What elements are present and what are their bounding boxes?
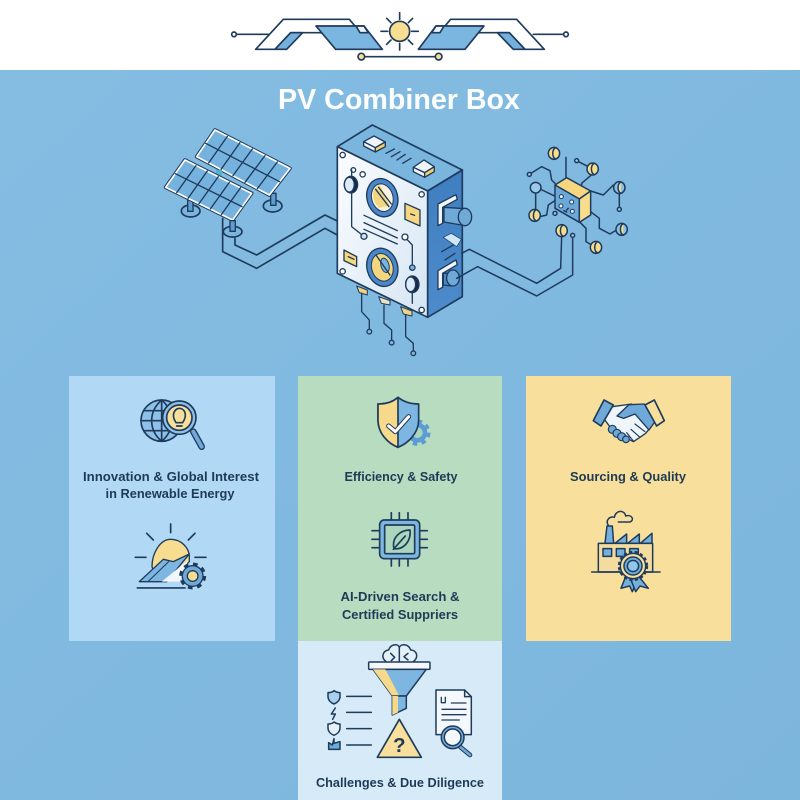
label: AI-Driven Search & bbox=[340, 590, 460, 604]
yellow coin nodes bbox=[529, 147, 627, 253]
front face screws bbox=[340, 152, 424, 313]
label text lines bbox=[364, 215, 397, 244]
central cube bbox=[555, 178, 591, 222]
icon: factory with rosette bbox=[592, 511, 660, 592]
header emblem: circuit panels and sun bbox=[232, 13, 568, 60]
label line 2: Certified Suppriers bbox=[342, 608, 458, 622]
icon: brain funnel bbox=[369, 645, 430, 715]
title: PV Combiner Box bbox=[278, 84, 520, 116]
rotary dials bbox=[362, 175, 402, 290]
icon: shield with gear bbox=[378, 397, 428, 447]
icon: handshake bbox=[593, 400, 664, 443]
panel: efficiency and AI search bbox=[298, 376, 502, 641]
small terminal dots bbox=[527, 159, 621, 237]
label: Sourcing & Quality bbox=[570, 470, 686, 484]
icon: document with magnifier bbox=[436, 690, 471, 755]
icon: chip with leaf bbox=[372, 513, 427, 566]
solar array bbox=[166, 130, 290, 237]
illustration: solar panels and combiner box bbox=[166, 125, 472, 356]
panel: sourcing and quality bbox=[526, 376, 731, 641]
knobs and traces bbox=[344, 170, 419, 303]
label line 2: in Renewable Energy bbox=[106, 487, 234, 501]
bottom terminals and leads bbox=[357, 286, 416, 356]
label: Challenges & Due Diligence bbox=[316, 775, 484, 790]
icon: globe with lightbulb magnifier bbox=[141, 400, 202, 447]
label: Innovation & Global Interest bbox=[83, 470, 260, 484]
top vents and blocks bbox=[364, 136, 434, 177]
icon: sun over solar panel with gear bbox=[135, 524, 206, 588]
wires from solar panels to box bbox=[223, 215, 337, 268]
side connectors bbox=[438, 195, 472, 290]
network node illustration bbox=[457, 147, 627, 296]
icon: warning triangle: ? bbox=[393, 734, 406, 757]
header band bbox=[0, 0, 800, 70]
output wires bbox=[457, 157, 619, 296]
label: Efficiency & Safety bbox=[344, 470, 458, 484]
icon: checklist of risks bbox=[328, 691, 371, 749]
yellow labels bbox=[344, 203, 420, 267]
panel: innovation bbox=[69, 376, 275, 641]
panel: challenges and due diligence bbox=[298, 641, 502, 800]
icon: warning triangle bbox=[377, 719, 421, 757]
combiner box bbox=[337, 125, 472, 356]
